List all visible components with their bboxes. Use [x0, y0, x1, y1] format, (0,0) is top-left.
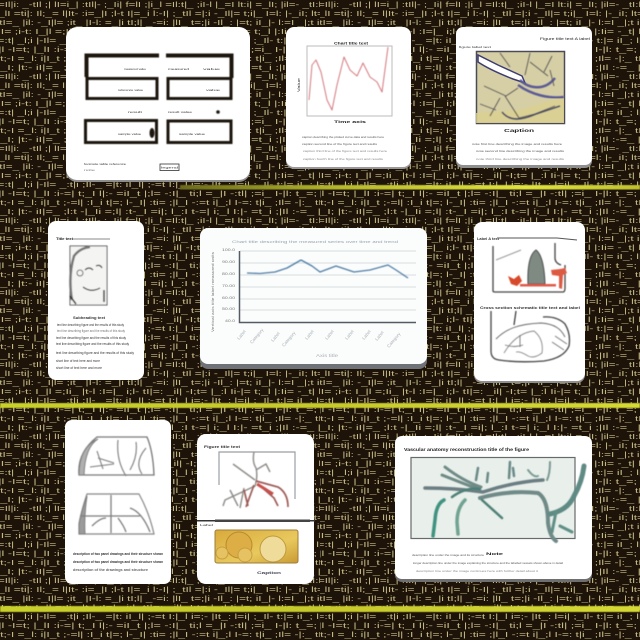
table frame: [86, 56, 232, 142]
schematic label bar: Cross section schematic title text and label: [480, 305, 580, 310]
chart caption: caption fourth line of the figure text and results: [303, 157, 384, 161]
table footnote: legend: [161, 166, 179, 170]
chart caption: caption second line of the figure text and results: [302, 142, 378, 146]
panel: two dome drawings: [65, 420, 171, 584]
table row labels: result value: [168, 111, 193, 114]
divider label: [197, 520, 315, 527]
figure text: text line describing figure and the results of this study: [56, 336, 126, 340]
red curve chart: Value: [297, 78, 301, 92]
figure text: text line describing figure and the results of this study: [57, 323, 124, 327]
x axis labels: Label: [344, 329, 355, 341]
chart caption: caption third line of the figure text and results here: [303, 149, 387, 153]
chart title: Chart title describing the measured series over time and trend: [232, 239, 398, 244]
image caption: Note: [486, 551, 504, 556]
branching vessels: [219, 452, 295, 508]
y axis labels: [211, 248, 235, 332]
figure notes: note first line describing the image and results here: [472, 142, 562, 146]
figure text: description of two panel drawings and their structure shown: [73, 560, 163, 564]
table row labels: measured value: [124, 68, 147, 71]
figure notes: description line under the image and its structure: [412, 553, 484, 557]
panel heading: Title text: [56, 237, 74, 241]
table footnote: note: [84, 169, 96, 172]
red curve chart: Time axis: [334, 119, 367, 124]
figure notes: description line under the image continues here with further detail about it: [416, 569, 538, 573]
table row labels: sample value: [179, 133, 206, 136]
yellow band: upper: [180, 185, 640, 190]
panel: table of boxes: [66, 27, 250, 182]
figure text: short line of text here and more: [56, 359, 100, 363]
yellow band: middle: [0, 403, 640, 408]
dome drawing top: [79, 437, 154, 476]
chart title: Chart title text: [334, 42, 369, 46]
y axis labels: 80.00: [222, 272, 235, 276]
x axis labels: [236, 327, 402, 358]
table footnote: [84, 162, 179, 172]
vessel image: [411, 458, 584, 541]
panel: teal vessel figure: [395, 436, 592, 582]
x axis labels: Axis title: [316, 353, 339, 358]
figure notes: longer description line under the image explaining the structure and the labelled vessels shown above in detail: [413, 561, 563, 565]
y axis labels: 100.0: [222, 248, 235, 252]
line chart: [240, 251, 416, 322]
figure text: [73, 552, 163, 572]
x axis labels: Category: [249, 327, 265, 345]
table row labels: reference value: [118, 89, 144, 92]
y axis labels: 40.0: [225, 319, 235, 323]
panel heading: Figure title text: [204, 445, 241, 449]
figure text: text line describing figure and the results of this study: [57, 329, 125, 333]
x axis labels: Label: [374, 330, 385, 342]
figure text: text line describing figure and the results of this study: [56, 351, 134, 355]
x axis labels: Label: [304, 329, 315, 341]
red curve chart: [297, 46, 392, 124]
table row labels: value: [206, 89, 221, 92]
panel: portrait figure: [48, 221, 144, 380]
schematic with red blobs: [493, 243, 567, 292]
image caption: Caption: [504, 128, 534, 133]
table row labels: value: [203, 68, 222, 71]
figure notes: [412, 553, 563, 573]
table row labels: [118, 68, 222, 136]
table row labels: sample value: [118, 133, 142, 136]
chart caption: caption describing the plotted curve data and results here: [302, 135, 384, 139]
figure notes: note third line describing the image and results: [476, 157, 565, 161]
figure text: [56, 316, 134, 370]
panel heading: Vascular anatomy reconstruction title of the figure: [404, 447, 530, 452]
panel: two schematics: [474, 222, 585, 383]
dome drawing bottom: [79, 494, 154, 534]
image caption: Caption: [257, 570, 282, 575]
x axis labels: Category: [281, 330, 297, 348]
panel: blue line chart: [200, 228, 427, 369]
panel heading: Figure title text A label: [540, 36, 590, 41]
schematic heading: [477, 237, 577, 241]
figure text: description of the drawings and structure: [73, 568, 148, 572]
x axis labels: Label: [236, 329, 247, 341]
chart caption: [302, 135, 387, 161]
table row labels: result: [128, 111, 143, 114]
panel: red line chart: [286, 27, 411, 169]
y axis labels: 70.00: [222, 284, 235, 288]
table row labels: measured: [168, 68, 190, 71]
panel: anatomy photo: [456, 27, 592, 168]
figure text: text line describing figure and the results of this study: [56, 342, 129, 346]
y axis labels: 60.00: [222, 296, 235, 300]
figure text: description of two panel drawings and their structure shown: [73, 552, 163, 556]
divider label: Label: [200, 523, 214, 527]
figure text: short line of text here and more: [56, 366, 102, 370]
gold slices image: [215, 530, 298, 563]
x axis labels: Category: [386, 331, 402, 349]
table footnote: footnote table reference: [84, 162, 126, 166]
panel: roots and gold image: [197, 434, 315, 584]
schematic heading: Label A text: [477, 237, 500, 241]
x axis labels: Label: [361, 329, 372, 341]
y axis labels: 90.00: [222, 260, 235, 264]
cracked tissue image: [476, 52, 564, 124]
yellow band: lower: [0, 606, 640, 612]
x axis labels: Label: [270, 331, 281, 343]
y axis labels: Vertical axis title label measured units: [211, 252, 215, 332]
figure text: Subheading text: [73, 316, 106, 320]
organ illustration: [70, 246, 107, 305]
figure notes: note second line describing the image and results: [476, 149, 565, 153]
y axis labels: 50.00: [222, 307, 235, 311]
figure notes: [472, 142, 565, 161]
cross-section outline: [491, 311, 570, 362]
panel heading: [56, 237, 110, 241]
x axis labels: Label: [324, 329, 335, 341]
small label: figure label text: [459, 45, 491, 49]
